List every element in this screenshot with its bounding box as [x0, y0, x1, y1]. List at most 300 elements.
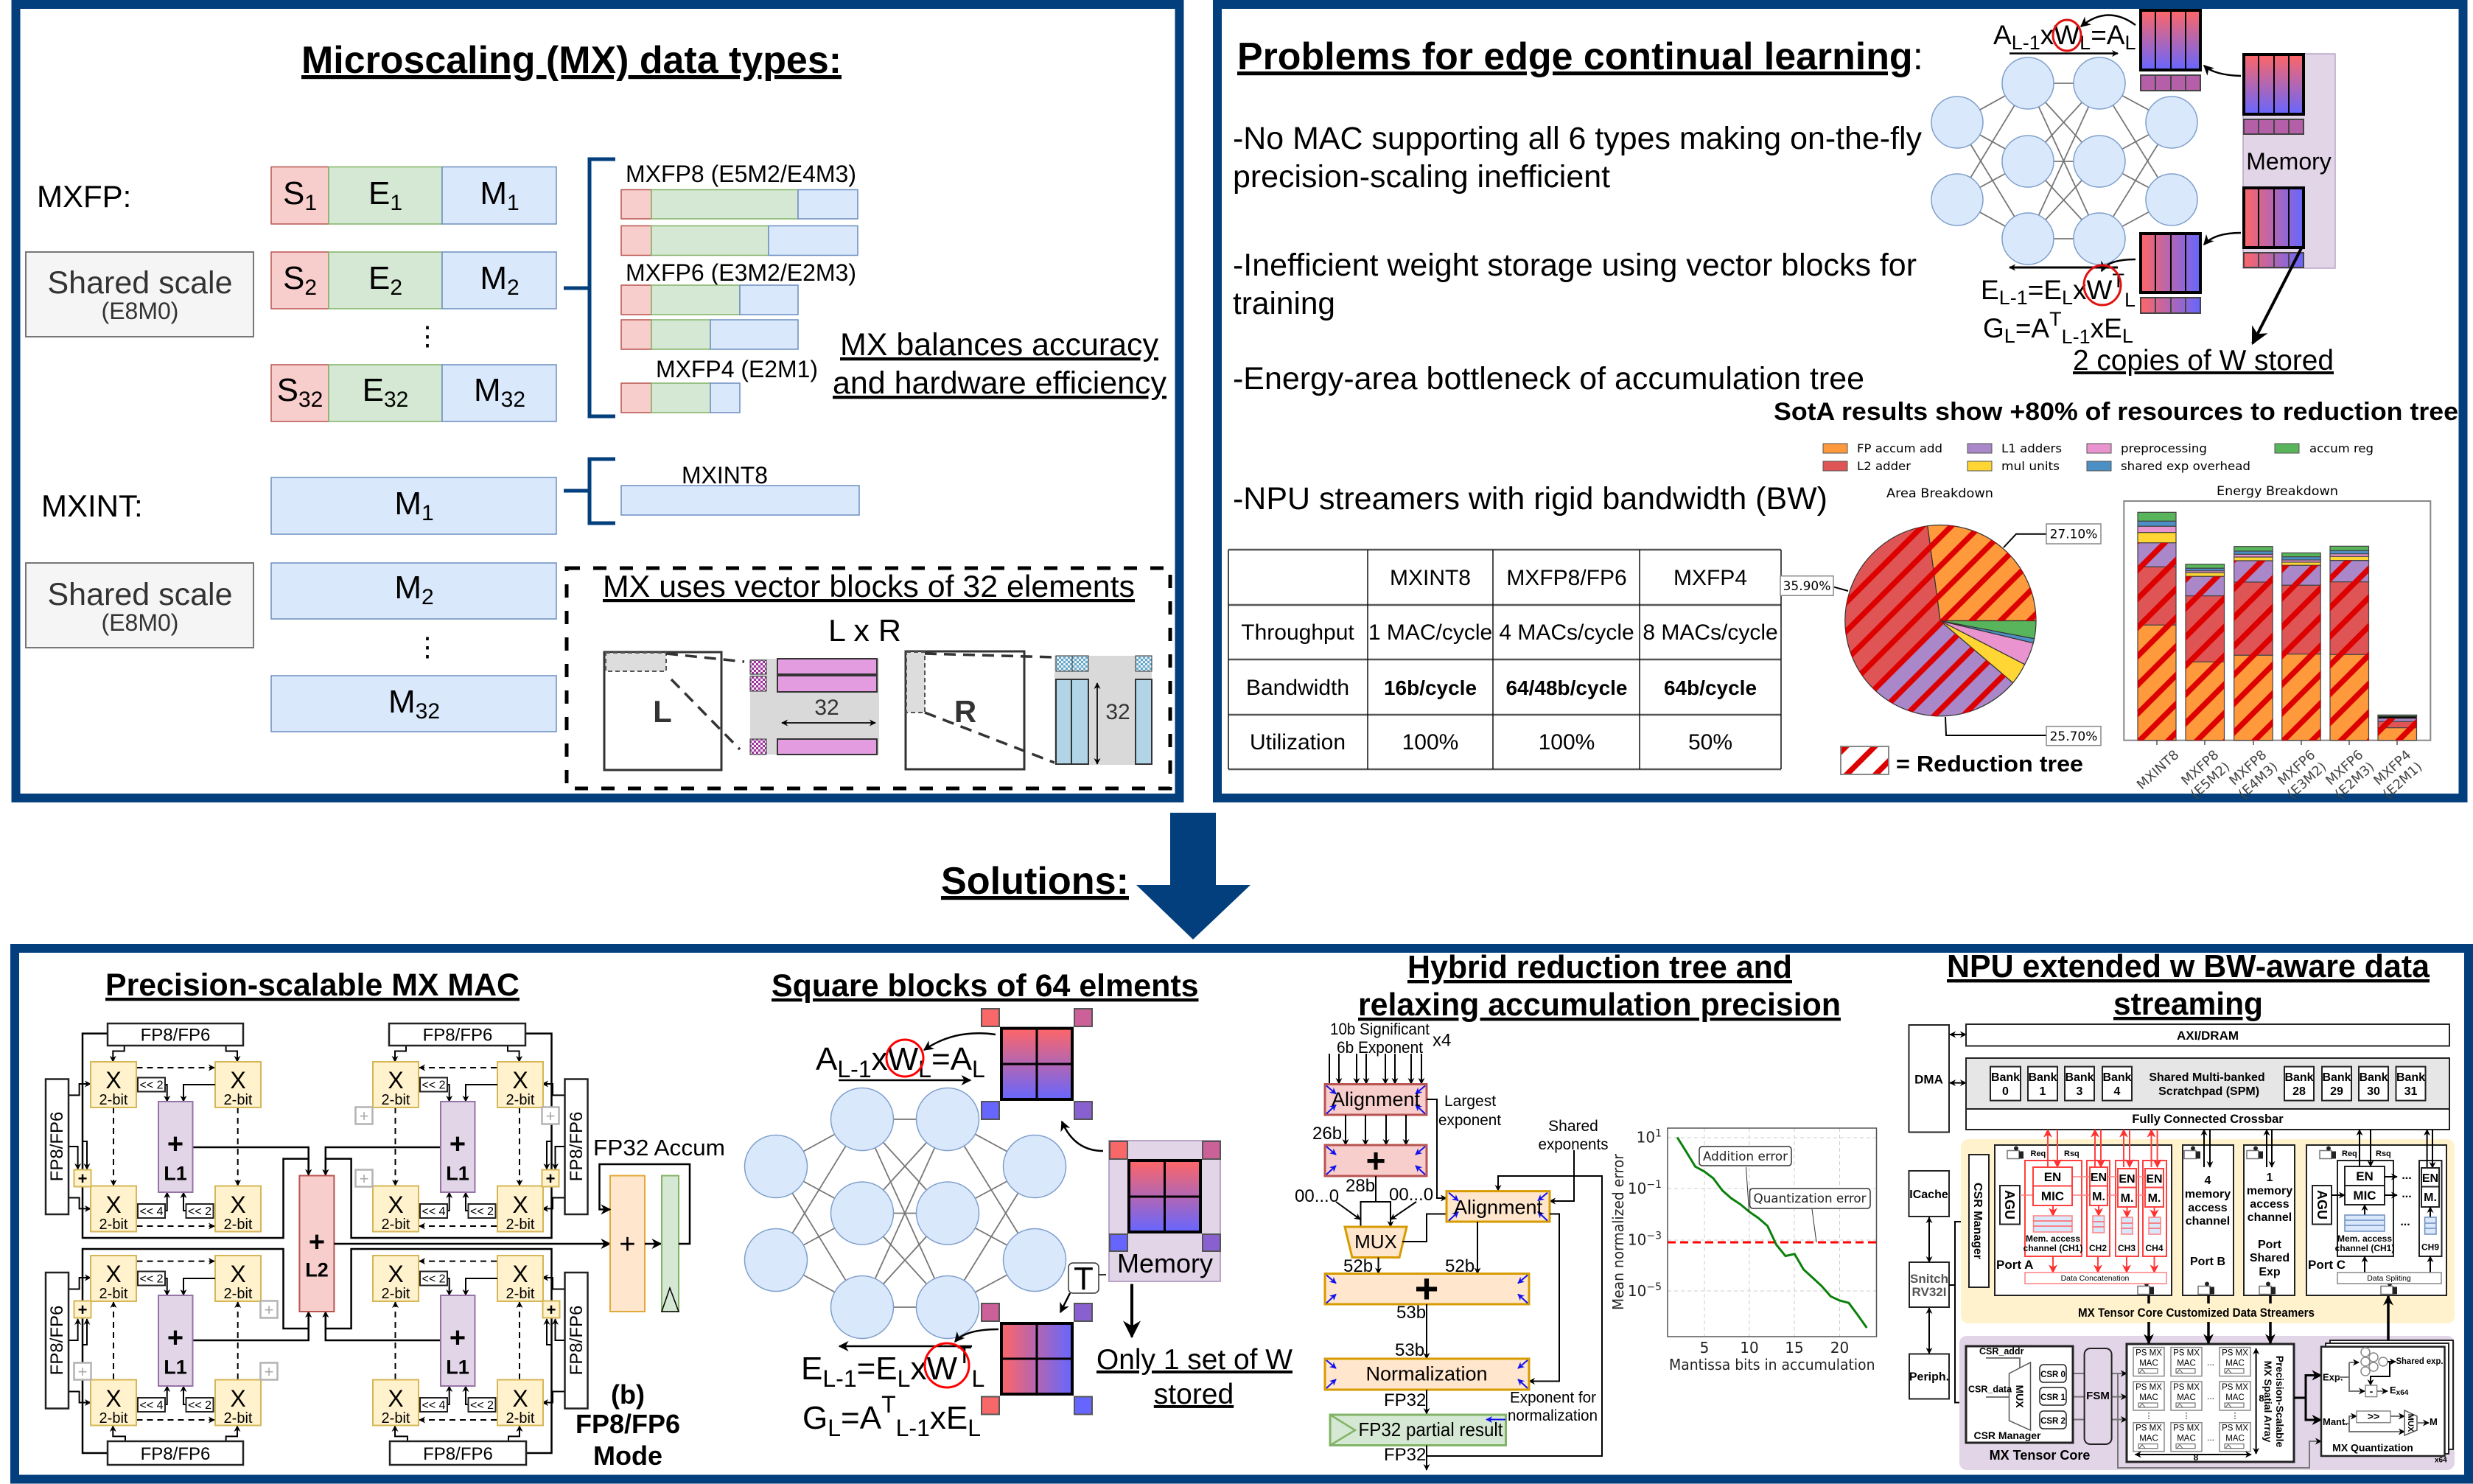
mode label: (b) — [611, 1379, 645, 1410]
L row blocks: 32 — [814, 696, 839, 720]
block: MUX — [1345, 1227, 1407, 1257]
chart: energy stacked bars — [2124, 501, 2430, 745]
port C — [2306, 1130, 2446, 1295]
red circle: W transpose — [925, 1343, 969, 1387]
legend: breakdown: preprocessing — [2121, 441, 2207, 455]
label: MXFP4: MXFP4 (E2M1) — [656, 356, 818, 382]
bar: M1: M — [394, 486, 422, 522]
port A: MIC — [2041, 1189, 2064, 1203]
MAC quadrant: top right: 2-bit — [506, 1092, 535, 1108]
table: throughput and bandwidth: 64/48b/cycle — [1505, 676, 1628, 699]
block: adder L1: + — [1366, 1141, 1385, 1180]
spatial array: PS MX — [2222, 1383, 2248, 1392]
problem text: storage: -Inefficient weight storage using vector blocks for — [1233, 248, 1917, 283]
FP32 accumulator: FP32 Accum — [593, 1135, 725, 1161]
table: throughput and bandwidth: 100% — [1402, 730, 1458, 755]
arrow: memory to top block — [1062, 1121, 1103, 1151]
port shared exp: Port — [2258, 1239, 2282, 1251]
problem text: storage: training — [1233, 286, 1335, 321]
spatial array: PS MX — [2173, 1424, 2200, 1433]
CSR manager: CSR_data — [1968, 1384, 2012, 1394]
port B: Port B — [2190, 1256, 2225, 1268]
arrow: forward — [839, 1079, 970, 1081]
equation: forward: L-1 — [2012, 32, 2040, 54]
problem text: storage — [1233, 248, 1917, 321]
port B: access — [2188, 1202, 2228, 1214]
wire: shared exponents — [1550, 1150, 1574, 1201]
wires: outer routes — [69, 1034, 564, 1453]
L2 adder: + — [309, 1227, 325, 1258]
equation: backward: L — [2062, 287, 2073, 309]
chart: mean normalized error: 10 — [1740, 1339, 1759, 1357]
label: exponent for normalization: Exponent for — [1510, 1390, 1596, 1406]
equation: forward: L — [2080, 32, 2091, 54]
legend: breakdown: L2 adder — [1857, 459, 1911, 473]
weight block: bottom square — [982, 1303, 1092, 1415]
equation: forward: x — [2040, 20, 2054, 50]
MAC quadrant: top left: << 2 — [139, 1079, 164, 1092]
bar: MXFP6 E3M2 — [2282, 553, 2320, 741]
equation: forward: L-1 — [837, 1056, 872, 1082]
L2 adder — [299, 1176, 334, 1312]
label: FP32 output: FP32 — [1384, 1445, 1426, 1465]
callout: 35.90%: 35.90% — [1783, 579, 1830, 594]
block: scratchpad: 29 — [2330, 1085, 2343, 1098]
port C: ... — [2400, 1216, 2410, 1228]
MAC quadrant: bottom left: << 2 — [139, 1273, 164, 1285]
table: throughput and bandwidth: 4 MACs/cycle — [1499, 620, 1634, 645]
arrow: block to W — [924, 1033, 996, 1050]
equation: backward: T — [957, 1342, 972, 1368]
bar: MXFP8 E4M3 — [621, 225, 858, 255]
problem text: MAC: precision-scaling inefficient — [1233, 159, 1610, 195]
chart x-axis labels: MXFP4 — [2371, 747, 2414, 788]
matrix L — [604, 652, 744, 770]
MAC quadrant: top left: 2-bit — [224, 1217, 253, 1233]
arrow: transpose to bottom block — [1060, 1293, 1070, 1312]
takeaway: balance — [833, 327, 1166, 401]
small adders: + — [265, 1362, 273, 1381]
L row blocks — [750, 659, 879, 755]
label: MXFP: MXFP: — [37, 179, 131, 214]
label: MX tensor core: MX Tensor Core — [1990, 1448, 2090, 1463]
MAC quadrant: bottom right: X — [388, 1385, 404, 1412]
block: normalization — [1325, 1359, 1529, 1390]
panel: problems for edge continual learning — [1217, 4, 2463, 802]
block: DMA — [1909, 1025, 1949, 1132]
callout: vector blocks of 32: MX uses vector blocks of 32 elements — [603, 569, 1135, 603]
heading: hybrid — [1358, 949, 1841, 1023]
memory block — [1109, 1141, 1220, 1281]
chart x-axis labels — [2134, 747, 2425, 802]
MAC quadrant: bottom right: + — [450, 1323, 466, 1354]
arrow: problems to solutions — [1136, 813, 1251, 939]
spatial array: MAC — [2139, 1393, 2158, 1402]
equation: gradient: =A — [841, 1400, 882, 1436]
CSR manager — [1966, 1346, 2073, 1443]
row: S1 E1 M1 — [271, 167, 556, 224]
takeaway: balance: and hardware efficiency — [833, 365, 1166, 401]
annotation: quantization error — [1750, 1189, 1870, 1242]
equation: gradient: =A — [2015, 313, 2049, 343]
equation: gradient: G — [802, 1400, 828, 1436]
note: only 1 set of W: Only 1 set of W — [1096, 1344, 1293, 1376]
equation: gradient: G — [1983, 313, 2004, 343]
spatial array: ... — [2207, 1391, 2214, 1401]
arrow: backward — [839, 1345, 972, 1347]
block: partial result — [1330, 1415, 1506, 1446]
chart x-axis labels: MXFP8 — [2178, 747, 2222, 788]
chart x-axis labels: MXFP6 — [2323, 747, 2366, 788]
equation: gradient: L — [968, 1415, 981, 1441]
equation: gradient: L — [828, 1415, 841, 1441]
chart x-axis labels: MXFP6 — [2275, 747, 2318, 788]
CSR manager: CSR 0 — [2040, 1371, 2066, 1379]
quantization block: Exp. — [2323, 1372, 2343, 1382]
spatial array: MAC — [2177, 1435, 2196, 1443]
arrows: DMA to memory — [1950, 1035, 1966, 1083]
heading: solutions: Solutions: — [941, 860, 1129, 903]
port A: Rsq — [2064, 1149, 2080, 1158]
MAC quadrant: bottom right — [373, 1256, 543, 1427]
FP32 accumulator: + — [619, 1229, 636, 1260]
small adders: + — [547, 1301, 556, 1319]
MAC quadrant: bottom left: X — [105, 1385, 122, 1412]
MAC quadrant: bottom left: << 4 — [139, 1399, 164, 1412]
MAC quadrant: top right: X — [512, 1191, 528, 1218]
wires: array to quantization — [2294, 1375, 2321, 1420]
port A: Req — [2031, 1149, 2046, 1158]
weight block: backward — [2141, 234, 2200, 313]
CSR manager: CSR 1 — [2040, 1393, 2066, 1402]
port C: Port C — [2308, 1258, 2346, 1272]
port B: channel — [2186, 1215, 2230, 1228]
inputs label: x4 — [1433, 1030, 1451, 1051]
weight block: forward — [2141, 10, 2200, 91]
chart x-axis labels: (E2M3) — [2332, 759, 2377, 802]
equation: forward: x — [872, 1041, 888, 1077]
wires: 4 outputs — [1346, 1115, 1406, 1145]
FP8/FP6 input boxes — [46, 1023, 588, 1465]
MAC quadrant: top left: X — [105, 1067, 122, 1093]
row: S1 E1 M1: 1 — [304, 191, 317, 215]
callout: 35.90% — [1780, 576, 1848, 595]
table: throughput and bandwidth: 16b/cycle — [1384, 676, 1477, 699]
port A: EN — [2044, 1170, 2061, 1184]
MAC quadrant: top left: + — [167, 1129, 183, 1160]
chart: mean normalized error: Mantissa bits in accumulation — [1669, 1356, 1875, 1373]
annotation: quantization error: Quantization error — [1754, 1191, 1867, 1206]
heading: hybrid: Hybrid reduction tree and — [1407, 949, 1792, 985]
annotation: addition error: Addition error — [1703, 1149, 1788, 1164]
block: partial result: FP32 partial result — [1359, 1418, 1503, 1441]
equation: backward: L — [2124, 289, 2136, 311]
port shared exp: Shared — [2250, 1252, 2290, 1264]
equation: gradient: xE — [2091, 313, 2122, 343]
MAC quadrant: bottom right: 2-bit — [382, 1286, 410, 1302]
block: scratchpad: Shared Multi-banked — [2149, 1071, 2265, 1084]
bar: M32: 32 — [416, 699, 440, 724]
block: scratchpad: Fully Connected Crossbar — [2132, 1113, 2284, 1126]
chart: mean normalized error: 1 — [1655, 1128, 1662, 1140]
equation: forward: L — [918, 1056, 931, 1082]
red circle: W — [886, 1040, 923, 1077]
wire: MUX to alignment — [1402, 1214, 1447, 1242]
labels: 52b: 52b — [1445, 1256, 1475, 1276]
FP8/FP6 input boxes: FP8/FP6 — [423, 1026, 492, 1045]
table: throughput and bandwidth: MXFP8/FP6 — [1506, 566, 1627, 590]
spatial array: MAC — [2225, 1393, 2245, 1402]
port C: Rsq — [2376, 1149, 2391, 1158]
small adders: + — [78, 1169, 87, 1188]
vertical CSR manager — [1969, 1155, 1989, 1287]
MAC quadrant: bottom right: 2-bit — [382, 1410, 410, 1427]
spatial array: ⋮ — [2231, 1412, 2239, 1421]
callout: 25.70% — [1945, 717, 2101, 746]
MAC quadrant: top right: L1 — [446, 1163, 469, 1185]
problem text: NPU: -NPU streamers with rigid bandwidth (BW) — [1233, 481, 1827, 517]
MAC quadrant: bottom right: 2-bit — [506, 1410, 535, 1427]
label: largest exponent: exponent — [1438, 1112, 1501, 1129]
block: scratchpad: 4 — [2114, 1085, 2121, 1098]
block: MUX: MUX — [1354, 1231, 1397, 1253]
MAC quadrant: bottom right: X — [388, 1261, 404, 1287]
band: MX tensor core — [1959, 1336, 2455, 1470]
equation: backward: =E — [857, 1351, 898, 1387]
table: throughput and bandwidth: 1 MAC/cycle — [1368, 620, 1492, 645]
wire: largest exponent — [1427, 1099, 1447, 1198]
mode label — [576, 1379, 680, 1471]
callout: 27.10% — [2004, 524, 2101, 547]
MAC quadrant: top left: L1 — [164, 1163, 187, 1185]
equation: gradient: L-1 — [2062, 326, 2091, 348]
equation: backward: E — [801, 1351, 822, 1387]
labels: 53b: 53b — [1396, 1303, 1426, 1323]
MAC quadrant: bottom left: 2-bit — [224, 1410, 253, 1427]
bar: MXINT8 — [2138, 512, 2176, 741]
panel: solutions — [15, 948, 2469, 1480]
label: MXINT8: MXINT8 — [682, 462, 768, 489]
port C: EN — [2356, 1169, 2374, 1183]
equation: forward: L — [972, 1056, 985, 1082]
block: scratchpad: 30 — [2367, 1085, 2380, 1098]
small adders — [74, 1107, 560, 1381]
matrix R: R — [954, 694, 976, 729]
heading: hybrid: relaxing accumulation precision — [1358, 987, 1841, 1023]
quantization block: x64 — [2396, 1389, 2409, 1397]
wires: 52b — [1378, 1222, 1477, 1273]
ellipsis dots 1: ⋮ — [414, 321, 441, 351]
spatial array: PS MX — [2222, 1349, 2248, 1358]
wire: FP32 output — [1426, 1446, 1427, 1470]
MAC quadrant: top left: 2-bit — [99, 1217, 128, 1233]
chart: mean normalized error: −5 — [1646, 1281, 1662, 1293]
chart: mean normalized error: −1 — [1646, 1179, 1662, 1191]
heading: NPU — [1947, 948, 2430, 1022]
row: S2 E2 M2 — [271, 252, 556, 309]
arrow: backward direction — [2009, 267, 2118, 268]
chart: mean normalized error: 5 — [1700, 1339, 1709, 1357]
block: alignment 2: Alignment — [1454, 1197, 1543, 1219]
arrows: streamers to tensor core — [2149, 1295, 2388, 1343]
bar: MXFP6 E3M2 — [621, 285, 798, 315]
legend: breakdown: FP accum add — [1857, 441, 1942, 455]
callout: vector blocks of 32: L x R — [828, 613, 901, 648]
MAC quadrant: bottom left: 2-bit — [99, 1410, 128, 1427]
MAC quadrant: top right: X — [388, 1191, 404, 1218]
row: S32 E32 M32 — [271, 365, 556, 421]
chart title: area: Area Breakdown — [1886, 486, 1993, 501]
callout: shared scale 1: Shared scale — [47, 265, 233, 301]
row: S1 E1 M1: 1 — [390, 191, 402, 215]
block: scratchpad: 0 — [2002, 1085, 2009, 1098]
label: exponent for normalization — [1508, 1390, 1598, 1424]
R column blocks: 32 — [1105, 700, 1130, 724]
MAC quadrant: bottom left: X — [230, 1261, 246, 1287]
inputs label — [1330, 1020, 1451, 1057]
FP8/FP6 input boxes: FP8/FP6 — [567, 1112, 587, 1181]
FP8/FP6 input boxes: FP8/FP6 — [141, 1444, 210, 1464]
MAC quadrant: top right — [373, 1062, 543, 1233]
bar: M2: M — [394, 570, 422, 606]
port C: Data Spliting — [2367, 1274, 2411, 1283]
port A: AGU — [2002, 1190, 2017, 1219]
port shared exp: channel — [2248, 1211, 2292, 1224]
row: S2 E2 M2: 2 — [390, 276, 402, 300]
spatial array: ... — [2207, 1357, 2214, 1368]
bar: MXFP6 E2M3 — [621, 320, 798, 349]
ellipsis dots 2: ⋮ — [414, 631, 441, 662]
chart title: energy: Energy Breakdown — [2217, 484, 2338, 499]
row: S2 E2 M2: 2 — [507, 276, 520, 300]
MAC quadrant: bottom left: L1 — [164, 1356, 187, 1378]
port C: ... — [2402, 1188, 2412, 1200]
label: shared exponents — [1539, 1118, 1608, 1153]
port C: Req — [2342, 1149, 2357, 1158]
row: S32 E32 M32: S — [277, 372, 298, 408]
input arrows — [1329, 1054, 1339, 1084]
sub-panel: square blocks — [744, 968, 1293, 1441]
equation: backward: xW — [2073, 275, 2113, 305]
chart x-axis labels: (E4M3) — [2236, 759, 2281, 802]
port C: EN — [2422, 1172, 2438, 1185]
equation: gradient: L — [2122, 325, 2133, 347]
spatial array: ⋮ — [2183, 1412, 2190, 1421]
quantization block: - — [2370, 1385, 2374, 1397]
row: S1 E1 M1: M — [480, 175, 507, 211]
equation: forward: A — [816, 1041, 837, 1077]
spatial array: MAC — [2225, 1435, 2245, 1443]
spatial array — [2127, 1344, 2294, 1463]
block: alignment 1 — [1325, 1085, 1427, 1115]
chart: mean normalized error: 10 — [1628, 1180, 1646, 1197]
port B: memory — [2185, 1188, 2231, 1201]
row: S32 E32 M32: 32 — [501, 388, 525, 412]
quantization block: MUX — [2406, 1414, 2415, 1432]
equation: backward: L — [898, 1365, 910, 1392]
port A: Data Concatenation — [2061, 1274, 2130, 1283]
spatial array: PS MX — [2136, 1383, 2162, 1392]
chart: mean normalized error: Mean normalized error — [1609, 1153, 1627, 1310]
port A: Mem. access — [2026, 1233, 2080, 1244]
port C: CH9 — [2421, 1242, 2439, 1253]
chart x-axis labels: (E2M1) — [2380, 759, 2425, 802]
equation: gradient: L — [2004, 325, 2015, 347]
chart: mean normalized error: 15 — [1785, 1339, 1804, 1357]
MAC quadrant: top left: X — [105, 1191, 122, 1218]
heading: NPU: NPU extended w BW-aware data — [1947, 948, 2430, 984]
MAC quadrant: bottom left: 2-bit — [224, 1286, 253, 1302]
problem text: MAC: -No MAC supporting all 6 types making on-the-fly — [1233, 121, 1922, 156]
equation: backward: L-1 — [822, 1365, 857, 1392]
wires: into MUX — [1336, 1176, 1416, 1227]
small adders: + — [360, 1107, 368, 1125]
takeaway: balance: MX balances accuracy — [840, 327, 1158, 363]
panel: microscaling MX data types — [16, 4, 1179, 798]
label: zero pad right: 00...0 — [1389, 1185, 1433, 1205]
MAC quadrant: top left: 2-bit — [224, 1092, 253, 1108]
equation: backward: T — [2112, 270, 2124, 292]
block: Snitch — [1909, 1262, 1949, 1307]
spatial array: PS MX — [2222, 1424, 2248, 1433]
MAC quadrant: top right: << 4 — [422, 1205, 446, 1218]
block: scratchpad: 1 — [2040, 1085, 2046, 1098]
bar: M1 — [271, 477, 556, 534]
legend: reduction tree hatch — [1841, 746, 2083, 777]
block: scratchpad: Bank — [2396, 1071, 2425, 1084]
label: exponent for normalization: normalization — [1508, 1407, 1598, 1424]
equation: forward: =A — [931, 1041, 973, 1077]
block: alignment 2 — [1447, 1191, 1550, 1222]
arrow: to 2 copies — [2253, 248, 2301, 343]
memory panel: Memory — [2246, 148, 2332, 175]
wire: exponent for normalization — [1529, 1214, 1559, 1381]
band: customized data streamers — [1961, 1130, 2455, 1323]
label: shared exponents: Shared — [1548, 1118, 1598, 1135]
port A: M. — [2148, 1192, 2161, 1205]
chart x-axis labels: (E3M2) — [2284, 759, 2329, 802]
band: customized data streamers: MX Tensor Core Customized Data Streamers — [2078, 1306, 2315, 1320]
CSR manager: CSR 2 — [2040, 1417, 2066, 1426]
port shared exp: memory — [2247, 1185, 2292, 1197]
small adders: + — [546, 1169, 555, 1188]
red circle: W forward — [2053, 20, 2081, 51]
port C: AGU — [2315, 1190, 2329, 1219]
small adders: + — [546, 1107, 555, 1125]
equation: backward: L — [972, 1365, 984, 1392]
block: scratchpad: Bank — [2028, 1071, 2057, 1084]
bracket: MXFP formats — [564, 159, 615, 416]
port shared exp — [2244, 1130, 2295, 1295]
equation: forward: W — [888, 1041, 919, 1077]
arrow: memory to note — [1130, 1284, 1133, 1337]
FSM: FSM — [2086, 1390, 2110, 1402]
block: scratchpad — [1966, 1058, 2449, 1130]
quantization block: x64 — [2435, 1456, 2447, 1465]
label: 26b: 26b — [1312, 1124, 1342, 1144]
diagram: neural network — [1931, 57, 2197, 265]
FSM — [2085, 1348, 2112, 1444]
arrow: block to W transpose — [2102, 259, 2136, 271]
quantization block: MX Quantization — [2332, 1441, 2413, 1453]
spatial array: PS MX — [2173, 1383, 2200, 1392]
table: throughput and bandwidth: MXFP4 — [1673, 566, 1747, 590]
callout: vector blocks of 32 — [567, 568, 1170, 788]
spatial array: 8 — [2194, 1452, 2199, 1463]
chart x-axis labels: MXFP8 — [2226, 747, 2270, 788]
MAC quadrant: bottom right: L1 — [446, 1356, 469, 1378]
equation: forward: A — [1993, 20, 2012, 50]
